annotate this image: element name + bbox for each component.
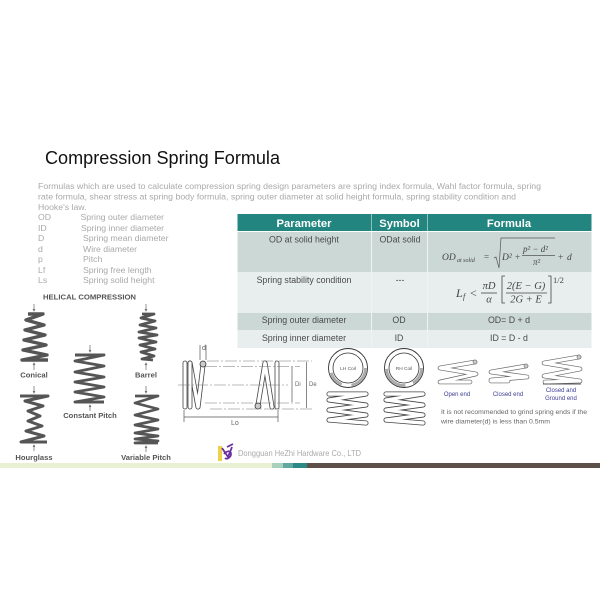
note on grinding spring ends: wire diameter(d) is less than 0.5mm xyxy=(440,418,550,426)
row: OD at solid height: OD at solid height xyxy=(269,234,340,244)
row: spring inner diameter: ID = D - d xyxy=(490,333,528,343)
symbol definitions list: Wire diameter xyxy=(83,244,137,254)
row: spring stability condition: L xyxy=(455,286,463,300)
table header: Formula xyxy=(487,218,532,230)
row: spring stability condition: < xyxy=(470,286,477,300)
row: OD at solid height: p² − d² xyxy=(522,244,548,254)
row: spring inner diameter xyxy=(262,333,528,343)
row: spring stability condition: α xyxy=(486,294,492,306)
row: spring stability condition: 2G + E xyxy=(510,294,542,306)
symbol definitions list xyxy=(38,212,169,285)
spring: conical xyxy=(20,304,48,380)
spring end: closed and ground end: Ground end xyxy=(545,396,577,402)
icon: company logo xyxy=(218,444,233,461)
row: OD at solid height xyxy=(269,234,572,268)
RH coil ring and spring: RH Coil xyxy=(396,366,412,372)
spring end: closed end: Closed end xyxy=(493,392,523,398)
note on grinding spring ends: It is not recommended to grind spring ends if the xyxy=(441,409,587,416)
spring dimension drawing: d xyxy=(202,345,206,352)
spring dimension drawing: Lo xyxy=(231,420,239,427)
table header xyxy=(238,214,592,231)
intro paragraph: rate formula, shear stress at spring body formula, spring outer diameter at solid height formula, spring stability condition and xyxy=(38,192,516,202)
row: spring stability condition xyxy=(257,275,564,306)
symbol definitions list: Ls xyxy=(38,275,48,285)
spring: barrel: Barrel xyxy=(135,370,157,380)
row: spring stability condition: 1/2 xyxy=(553,275,564,285)
row: spring stability condition: --- xyxy=(396,275,404,285)
intro paragraph: Formulas which are used to calculate compression spring design parameters are spring index formula, Wahl factor formula, spring xyxy=(38,181,541,191)
row: spring outer diameter xyxy=(262,315,530,325)
symbol definitions list: Lf xyxy=(38,265,46,275)
spring end: closed end xyxy=(491,364,528,398)
symbol definitions list: Spring inner diameter xyxy=(81,223,164,233)
row: spring stability condition: πD xyxy=(483,281,496,292)
row: spring stability condition: f xyxy=(463,292,467,301)
table header: Symbol xyxy=(379,218,420,230)
spring dimension drawing: De xyxy=(309,382,317,388)
spring: variable pitch: Variable Pitch xyxy=(121,453,171,462)
symbol definitions list: d xyxy=(38,244,43,254)
LH coil ring and spring xyxy=(328,348,368,423)
symbol definitions list: Spring outer diameter xyxy=(80,212,164,222)
spring: barrel xyxy=(135,304,157,380)
row: spring outer diameter: OD xyxy=(392,315,406,325)
row: OD at solid height: D² xyxy=(501,253,512,263)
spring dimension drawing: Di xyxy=(295,382,301,388)
symbol definitions list: Spring free length xyxy=(83,265,152,275)
row: spring outer diameter: Spring outer diameter xyxy=(262,315,346,325)
parameter table xyxy=(238,214,592,348)
LH coil ring and spring: LH Coil xyxy=(340,366,356,372)
symbol definitions list: ID xyxy=(38,223,47,233)
symbol definitions list: Spring solid height xyxy=(83,275,155,285)
table row backgrounds xyxy=(238,232,592,348)
spring: constant pitch xyxy=(63,345,117,420)
row: OD at solid height: + xyxy=(515,252,520,262)
spring: hourglass: Hourglass xyxy=(15,453,53,462)
row: OD at solid height: OD xyxy=(442,253,456,263)
row: OD at solid height: π² xyxy=(533,257,541,267)
row: OD at solid height: d xyxy=(567,253,572,263)
symbol definitions list: OD xyxy=(38,212,51,222)
row: spring stability condition: 2(E − G) xyxy=(507,281,546,292)
title: Compression Spring Formula xyxy=(45,147,281,168)
row: spring stability condition: Spring stability condition xyxy=(257,275,352,285)
intro paragraph xyxy=(38,181,541,212)
symbol definitions list: Pitch xyxy=(83,254,102,264)
row: OD at solid height: + xyxy=(558,253,563,263)
spring: variable pitch xyxy=(121,386,171,462)
symbol definitions list: D xyxy=(38,233,44,243)
symbol definitions list: Spring mean diameter xyxy=(83,233,169,243)
spring: hourglass xyxy=(15,386,53,462)
spring dimension drawing xyxy=(178,345,317,427)
row: OD at solid height: ODat solid xyxy=(379,234,421,244)
RH coil ring and spring xyxy=(384,348,424,423)
heading: helical compression: HELICAL COMPRESSION xyxy=(43,292,136,302)
row: OD at solid height: = xyxy=(484,252,489,262)
spring: conical: Conical xyxy=(20,370,48,380)
spring end: closed and ground end xyxy=(543,355,581,402)
spring: constant pitch: Constant Pitch xyxy=(63,411,117,420)
row: spring outer diameter: OD= D + d xyxy=(488,315,530,325)
row: spring inner diameter: ID xyxy=(395,333,403,343)
spring end: closed and ground end: Closed and xyxy=(546,388,576,394)
row: spring inner diameter: Spring inner diameter xyxy=(262,333,346,343)
footer colour band xyxy=(0,463,600,468)
row: OD at solid height: at solid xyxy=(457,258,476,264)
note on grinding spring ends xyxy=(440,409,587,426)
intro paragraph: Hooke's law. xyxy=(38,202,86,212)
symbol definitions list: p xyxy=(38,254,43,264)
spring end: open end xyxy=(440,360,477,398)
table header: Parameter xyxy=(276,218,332,230)
company name: Dongguan HeZhi Hardware Co., LTD xyxy=(238,448,361,458)
spring end: open end: Open end xyxy=(444,392,470,398)
